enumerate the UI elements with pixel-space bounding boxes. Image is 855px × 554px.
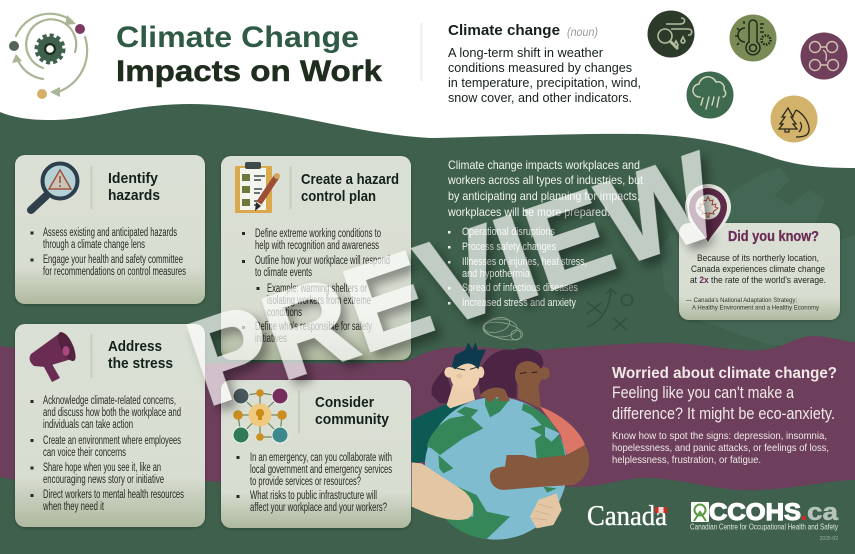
bullet list: Define extreme working conditions to: [255, 228, 381, 240]
definition of climate change: snow cover, and other indicators.: [448, 90, 632, 105]
left person: [412, 342, 486, 463]
heading: worried about climate change: Worried about climate change?: [612, 365, 837, 382]
bullet list: initiatives: [255, 333, 287, 345]
icon: climate indicators cycle: [800, 32, 848, 80]
bullet list: and discuss how both the workplace and: [43, 407, 181, 419]
intro paragraph: [447, 158, 644, 219]
right person: [515, 357, 585, 455]
arms and hands: [412, 388, 589, 528]
bullet list: Direct workers to mental health resources: [43, 489, 184, 501]
bullet list: to climate events: [255, 267, 312, 279]
heading: Create a hazard: [301, 171, 399, 188]
bullet list: can voice their concerns: [43, 447, 126, 459]
citation: A Healthy Environment and a Healthy Economy: [692, 304, 820, 312]
bullet list: Acknowledge climate-related concerns,: [43, 395, 176, 407]
logo: CCOHS: 2025-02: [820, 536, 838, 542]
bullet list: Assess existing and anticipated hazards: [43, 227, 177, 239]
impacts list: and hypothermia: [462, 268, 531, 280]
bullet list: when they need it: [42, 501, 105, 513]
icon: anxious scribble: [482, 315, 524, 343]
heading: [108, 338, 173, 372]
heading: [315, 394, 390, 428]
panel: consider community: [221, 380, 411, 528]
panel: did you know: [679, 184, 840, 320]
heading: Identify: [108, 170, 159, 187]
icon: rain cloud: [686, 72, 734, 118]
icon: map pin with maple leaf: [685, 184, 731, 245]
fact text: [690, 253, 826, 286]
definition of climate change: Climate change: [448, 22, 560, 39]
logo: CCOHS: CCOHS: [709, 499, 801, 526]
fact text: Because of its northerly location,: [697, 253, 819, 264]
bullet list: through a climate change lens: [43, 239, 145, 251]
intro paragraph: workplaces will be more prepared.: [447, 205, 610, 219]
globe: [425, 397, 567, 540]
heading: hazards: [108, 187, 160, 204]
heading: Did you know?: [728, 229, 819, 245]
bullet list: help with recognition and awareness: [255, 240, 379, 252]
bullet list: encouraging news story or initiative: [43, 474, 164, 486]
intro paragraph: workers across all types of industries, but: [447, 173, 644, 187]
intro paragraph: Climate change impacts workplaces and: [448, 158, 640, 172]
impacts list: Increased stress and anxiety: [462, 297, 576, 309]
bullet list: isolating workers from extreme: [267, 295, 371, 307]
icon: clipboard and pencil: [235, 162, 280, 213]
icon: thermometer, sun and snow: [730, 14, 776, 62]
title: Climate Change: [116, 21, 359, 54]
heading: Consider: [315, 394, 374, 411]
icon: community network: [233, 388, 288, 443]
illustration: two people holding the globe: [412, 342, 589, 540]
bullet list: local government and emergency services: [250, 464, 392, 476]
heading: worried about climate change: Feeling like you can't make a: [612, 384, 795, 402]
intro paragraph: by anticipating and planning for impacts,: [448, 189, 640, 203]
bullet list: [30, 395, 184, 513]
bullet list: affect your workplace and your workers?: [250, 502, 387, 514]
title: [116, 21, 382, 88]
bullet list: In an emergency, can you collaborate with: [250, 452, 392, 464]
heading: the stress: [108, 355, 173, 372]
panel: hazard control plan: [221, 156, 411, 360]
bullet list: for recommendations on control measures: [43, 266, 186, 278]
bullet list: Create an environment where employees: [43, 435, 181, 447]
fact text: at 2x the rate of the world's average.: [690, 275, 826, 286]
citation: [686, 297, 820, 312]
logo: CCOHS: ca: [807, 499, 839, 526]
eco-anxiety signs text: helplessness, frustration, or fatigue.: [612, 454, 761, 466]
panel: identify hazards: [15, 155, 205, 304]
heading: worried about climate change: [612, 365, 837, 423]
impacts list: [448, 226, 587, 309]
fact text: Canada experiences climate change: [691, 264, 825, 275]
definition of climate change: A long-term shift in weather: [448, 45, 604, 60]
bullet list: Outline how your workplace will respond: [255, 255, 390, 267]
bullet list: Example: warming shelters or: [267, 283, 367, 295]
eco-anxiety signs text: [612, 430, 829, 466]
icon: forest fire: [770, 96, 818, 142]
heading: [301, 171, 399, 205]
bullet list: [30, 227, 186, 278]
impacts list: Operational disruptions: [462, 226, 555, 238]
bullet list: conditions: [267, 307, 302, 319]
impacts list: Process safety changes: [462, 241, 556, 253]
eco-anxiety signs text: hopelessness, and panic attacks, or feelings of loss,: [612, 442, 829, 454]
bullet list: [242, 228, 390, 345]
bullet list: Define who's responsible for safety: [255, 321, 372, 333]
icon: megaphone: [30, 332, 76, 382]
bullet list: What risks to public infrastructure will: [250, 490, 377, 502]
title: Impacts on Work: [116, 55, 382, 88]
purple band: [0, 336, 855, 490]
bullet list: Engage your health and safety committee: [43, 254, 183, 266]
definition of climate change: [448, 22, 641, 105]
eco-anxiety signs text: Know how to spot the signs: depression, insomnia,: [612, 430, 827, 442]
logo: CCOHS: [690, 499, 839, 542]
heading: community: [315, 411, 390, 428]
bullet list: Share hope when you see it, like an: [43, 462, 161, 474]
impacts list: Illnesses or injuries, heat stress,: [462, 256, 587, 268]
icon: strategy x and o: [587, 289, 632, 330]
white header wave: [0, 0, 855, 168]
faint map of Canada: [660, 168, 855, 345]
definition of climate change: in temperature, precipitation, wind,: [448, 75, 641, 90]
icon: wind and magnifier: [648, 10, 694, 58]
purple hair behind both people: [431, 348, 543, 403]
heading: control plan: [301, 188, 376, 205]
heading: Address: [108, 338, 162, 355]
definition of climate change: conditions measured by changes: [448, 60, 632, 75]
bullet list: to provide services or resources?: [250, 476, 361, 488]
definition of climate change: (noun): [567, 27, 598, 39]
panel: address the stress: [15, 324, 205, 527]
icon: magnifier with warning: [31, 164, 78, 210]
impacts list: Spread of infectious diseases: [462, 282, 578, 294]
watermark: PREVIEW: PREVIEW: [172, 126, 735, 432]
citation: — Canada's National Adaptation Strategy;: [686, 297, 797, 304]
logo: gear and cycle arrows: [9, 14, 87, 99]
bullet list: [236, 452, 392, 514]
bullet list: individuals can take action: [43, 419, 133, 431]
heading: [108, 170, 160, 204]
logo: Canada wordmark: Canada: [587, 501, 668, 532]
